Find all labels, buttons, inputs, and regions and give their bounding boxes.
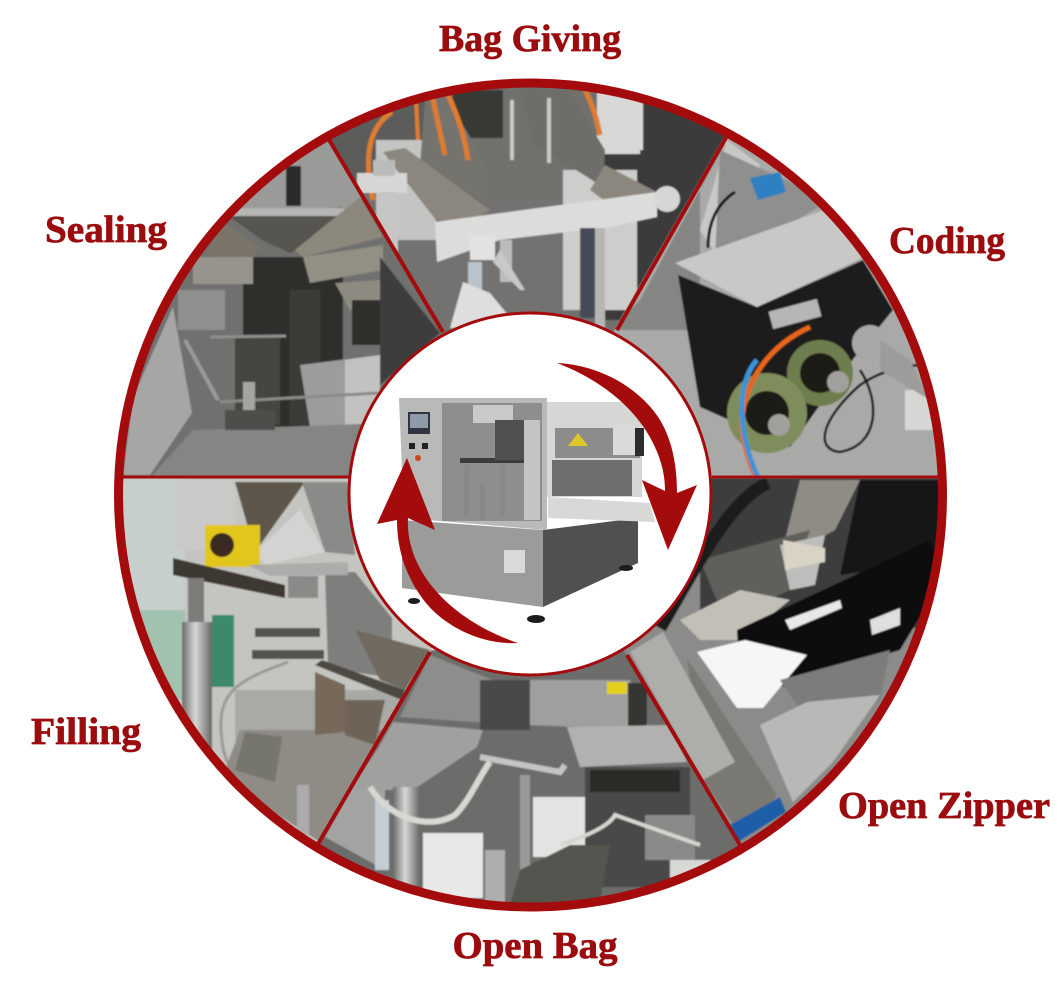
panel: open bag <box>320 649 738 902</box>
label: Bag Giving: Bag Giving <box>439 18 621 60</box>
outer ring <box>118 83 942 907</box>
wheel of process photos <box>110 60 960 920</box>
center circle <box>349 313 711 675</box>
arrow: clockwise upper right <box>557 363 697 550</box>
center machine <box>399 398 655 623</box>
panel: filling <box>123 478 432 842</box>
label: Open Zipper: Open Zipper <box>838 785 1050 827</box>
panel: bag giving <box>331 88 724 334</box>
label: Open Bag: Open Bag <box>452 925 618 967</box>
label: Coding: Coding <box>889 220 1005 262</box>
panel: coding <box>613 138 938 480</box>
label: Filling: Filling <box>31 711 141 753</box>
panel: open zipper <box>624 477 938 844</box>
label: Sealing: Sealing <box>45 209 167 251</box>
sector dividers <box>118 134 945 845</box>
panel: sealing <box>110 130 450 480</box>
arrow: clockwise lower left <box>377 458 518 643</box>
